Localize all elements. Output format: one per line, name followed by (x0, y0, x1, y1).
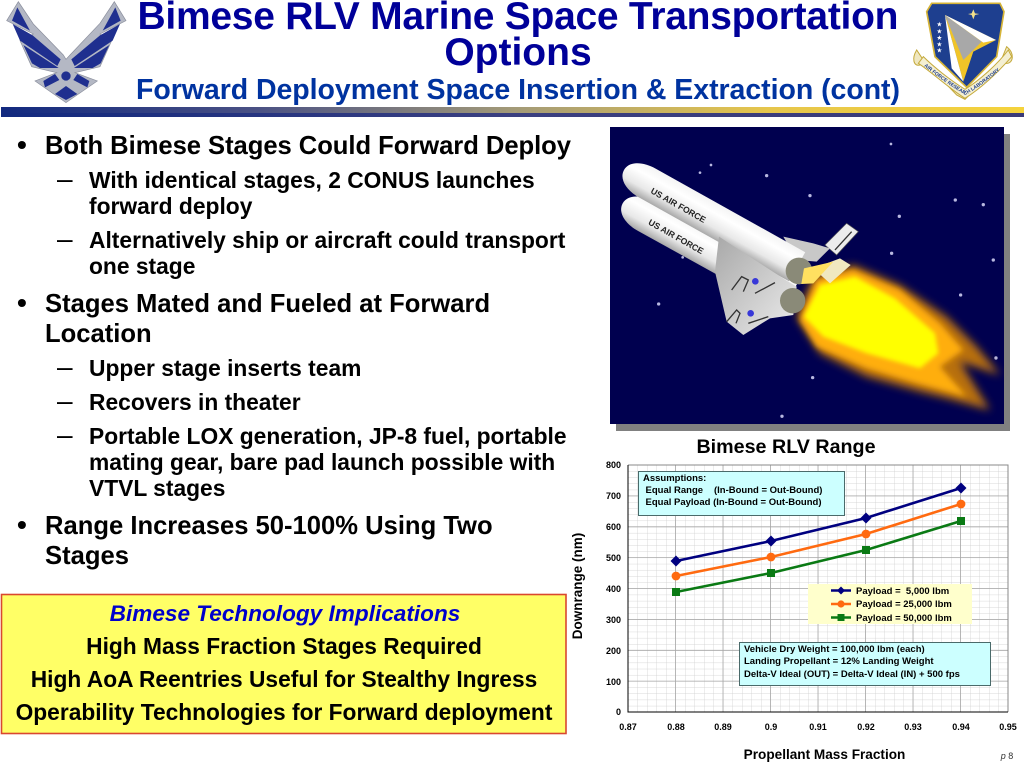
bullet: range increases: Stages (45, 542, 129, 570)
bullet: both stages: • (17, 129, 27, 160)
x axis labels: 0.94 (952, 722, 970, 732)
sub-bullet: portable LOX (57, 419, 567, 501)
callout: technology implications: High Mass Fraction Stages Required (86, 633, 482, 659)
sub-bullet: portable LOX: Portable LOX generation, JP-8 fuel, portable (89, 423, 567, 449)
plot grid (628, 465, 1008, 712)
note: assumptions: (In-Bound = Out-Bound) (714, 485, 822, 496)
logo: Air Force Research Laboratory shield: ★ (936, 47, 942, 55)
sub-bullet: portable LOX: VTVL stages (89, 475, 225, 501)
page number: p 8 (1000, 751, 1013, 761)
line chart: range vs propellant mass fraction (570, 460, 1017, 762)
note: vehicle parameters: Landing Propellant = 12% Landing Weight (744, 656, 934, 667)
bullet: mated and fueled (17, 287, 490, 348)
sub-bullet: upper stage: Upper stage inserts team (89, 355, 361, 381)
y axis labels: 300 (606, 615, 621, 625)
flame (797, 265, 1000, 410)
y axis labels: 200 (606, 646, 621, 656)
callout: technology implications: Bimese Technology Implications (110, 601, 460, 626)
x axis labels: 0.87 (619, 722, 637, 732)
bullet: range increases (17, 509, 493, 570)
upper wing (783, 237, 830, 262)
logo: Air Force Research Laboratory shield: ★ (936, 41, 942, 49)
chart title: Bimese RLV Range (696, 436, 876, 458)
sub-bullet: ship or aircraft: one stage (89, 253, 195, 279)
stage markings: US AIR FORCE (649, 186, 708, 225)
logo: Air Force Research Laboratory shield (913, 2, 1013, 100)
y axis title: Downrange (nm) (570, 533, 585, 639)
engine nozzles (786, 258, 812, 284)
x axis labels: 0.91 (809, 722, 827, 732)
legend: Payload = 5,000 lbm (856, 586, 949, 597)
sub-bullet: upper stage: – (57, 351, 73, 382)
x axis labels (619, 722, 1017, 732)
bullet: mated and fueled: • (17, 287, 27, 318)
stage markings: US AIR FORCE (647, 217, 706, 256)
legend (808, 584, 972, 624)
x axis labels: 0.88 (667, 722, 685, 732)
legend: Payload = 25,000 lbm (856, 599, 952, 610)
series: payload 50,000 lbm (672, 517, 965, 596)
logo: Air Force Research Laboratory shield: ★ (936, 21, 942, 29)
x axis title: Propellant Mass Fraction (744, 747, 905, 762)
logo: Air Force Research Laboratory shield: ★ (936, 34, 942, 42)
tail fins (825, 223, 858, 255)
note: assumptions (638, 472, 844, 516)
callout: technology implications: High AoA Reentries Useful for Stealthy Ingress (31, 666, 537, 692)
bullet: range increases: • (17, 509, 27, 540)
sub-bullet: ship or aircraft: Alternatively ship or aircraft could transport (89, 227, 566, 253)
upper stage tube (616, 155, 805, 281)
y axis labels: 500 (606, 553, 621, 563)
sub-bullet: identical stages: – (57, 163, 73, 194)
sub-bullet: portable LOX: – (57, 419, 73, 450)
sub-bullet: portable LOX: mating gear, bare pad launch possible with (89, 449, 555, 475)
stars (657, 143, 998, 418)
image: rocket in space (610, 127, 1010, 431)
note: vehicle parameters (740, 642, 990, 686)
bullet: mated and fueled: Stages Mated and Fueled at Forward (45, 290, 490, 318)
logo: Air Force Research Laboratory shield: AIR FORCE RESEARCH LABORATORY (924, 64, 999, 95)
y axis labels (606, 460, 621, 717)
x axis labels: 0.95 (999, 722, 1017, 732)
y axis labels: 800 (606, 460, 621, 470)
stage markings (647, 186, 708, 256)
legend: Payload = 50,000 lbm (856, 613, 952, 624)
callout: technology implications (2, 594, 566, 734)
sub-bullet: ship or aircraft (57, 223, 566, 279)
note: assumptions: Equal Range (646, 485, 703, 496)
sub-bullet: recovers: Recovers in theater (89, 389, 301, 415)
title: Options (444, 31, 592, 74)
x axis labels: 0.9 (765, 722, 777, 732)
sub-bullet: identical stages (57, 163, 535, 219)
note: assumptions: Equal Payload (In-Bound = Out-Bound) (646, 497, 822, 508)
sub-bullet: identical stages: With identical stages, 2 CONUS launches (89, 167, 535, 193)
bullet: range increases: Range Increases 50-100% Using Two (45, 512, 493, 540)
y axis labels: 600 (606, 522, 621, 532)
sub-bullet: recovers: – (57, 385, 73, 416)
sub-bullet: ship or aircraft: – (57, 223, 73, 254)
lower wing (715, 237, 797, 335)
series: payload 25,000 lbm (672, 500, 965, 580)
x axis labels: 0.89 (714, 722, 732, 732)
y axis labels: 700 (606, 491, 621, 501)
note: assumptions: Assumptions: (643, 473, 706, 484)
callout: technology implications: Operability Technologies for Forward deployment (16, 699, 553, 725)
subtitle: Forward Deployment Space Insertion & Extraction (cont) (136, 74, 900, 106)
x axis labels: 0.92 (857, 722, 875, 732)
y axis labels: 100 (606, 677, 621, 687)
logo: Air Force Research Laboratory shield: ★ (936, 27, 942, 35)
header band (1, 107, 1024, 117)
sub-bullet: identical stages: forward deploy (89, 193, 253, 219)
bullet: mated and fueled: Location (45, 320, 152, 348)
series: payload 5,000 lbm (670, 482, 966, 566)
lower stage tube (615, 189, 798, 311)
note: vehicle parameters: Vehicle Dry Weight = 100,000 lbm (each) (744, 644, 925, 655)
y axis labels: 400 (606, 584, 621, 594)
note: vehicle parameters: Delta-V Ideal (OUT) = Delta-V Ideal (IN) + 500 fps (744, 669, 960, 680)
x axis labels: 0.93 (904, 722, 922, 732)
logo: Air Force wings (7, 2, 126, 103)
title (138, 0, 898, 74)
y axis labels: 0 (616, 707, 621, 717)
bullet: both stages: Both Bimese Stages Could Forward Deploy (45, 132, 572, 160)
bullet list (17, 129, 572, 570)
